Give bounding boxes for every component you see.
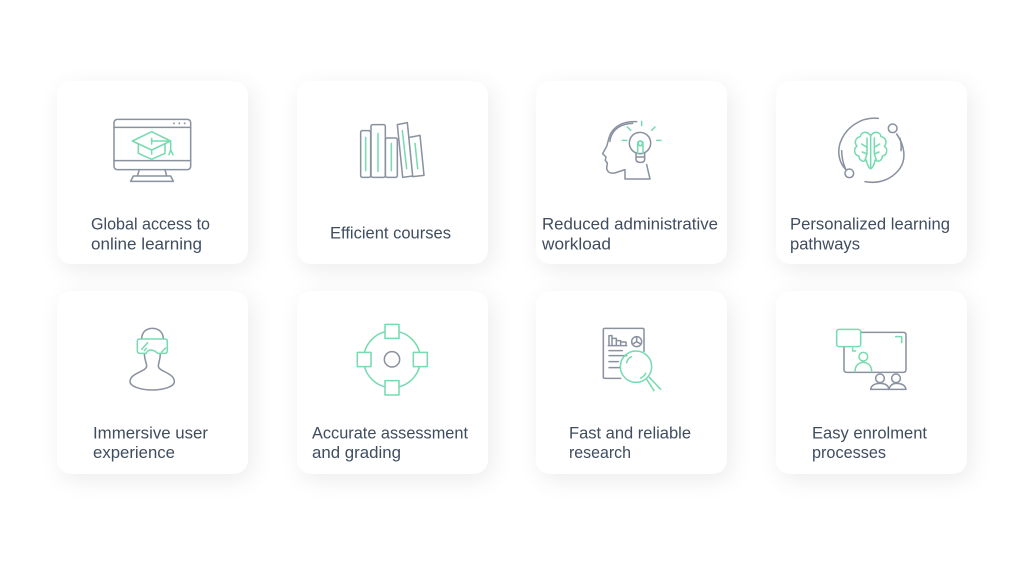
icon: person with VR headset bbox=[129, 328, 176, 391]
text: Personalized learning pathways bbox=[790, 214, 950, 254]
text: Immersive user experience: Immersive user bbox=[93, 424, 208, 442]
text: Reduced administrative workload: workload bbox=[541, 234, 611, 254]
text: Efficient courses: Efficient courses bbox=[330, 224, 451, 242]
panel: fast and reliable research bbox=[536, 291, 727, 474]
icon: document with magnifier bbox=[602, 328, 662, 392]
text: Easy enrolment processes: processes bbox=[812, 443, 886, 462]
text: Global access to online learning bbox=[91, 214, 210, 254]
panel: accurate assessment and grading bbox=[297, 291, 488, 474]
icon: target with four nodes bbox=[356, 324, 428, 396]
text: Reduced administrative workload bbox=[541, 214, 718, 254]
icon: video presentation screen bbox=[836, 328, 907, 390]
icon: brain with orbit bbox=[838, 117, 905, 184]
text: Global access to online learning: online learning bbox=[91, 234, 202, 254]
panel: immersive user experience bbox=[57, 291, 248, 474]
text: Personalized learning pathways: Personalized learning bbox=[790, 214, 950, 234]
panel: global access to online learning bbox=[57, 81, 248, 264]
icon: head with light bulb bbox=[602, 120, 662, 180]
text: Accurate assessment and grading: Accurate assessment bbox=[312, 424, 468, 442]
text: Personalized learning pathways: pathways bbox=[790, 234, 860, 254]
icon: books bbox=[360, 122, 425, 178]
text: Fast and reliable research: research bbox=[569, 443, 631, 462]
text: Accurate assessment and grading: and grading bbox=[312, 443, 401, 462]
panel: personalized learning pathways bbox=[776, 81, 967, 264]
text: Accurate assessment and grading bbox=[312, 424, 468, 462]
text: Immersive user experience bbox=[93, 424, 208, 462]
text: Easy enrolment processes bbox=[812, 424, 927, 462]
text: Fast and reliable research: Fast and reliable bbox=[569, 424, 691, 442]
text: Fast and reliable research bbox=[569, 424, 691, 462]
panel: reduced administrative workload bbox=[536, 81, 727, 264]
panel: efficient courses bbox=[297, 81, 488, 264]
panel: easy enrolment processes bbox=[776, 291, 967, 474]
icon: monitor with graduation cap bbox=[113, 118, 192, 182]
text: Global access to online learning: Global access to bbox=[91, 214, 210, 234]
text: Immersive user experience: experience bbox=[93, 443, 175, 462]
text: Reduced administrative workload: Reduced administrative bbox=[542, 214, 718, 234]
text: Easy enrolment processes: Easy enrolment bbox=[812, 424, 927, 442]
